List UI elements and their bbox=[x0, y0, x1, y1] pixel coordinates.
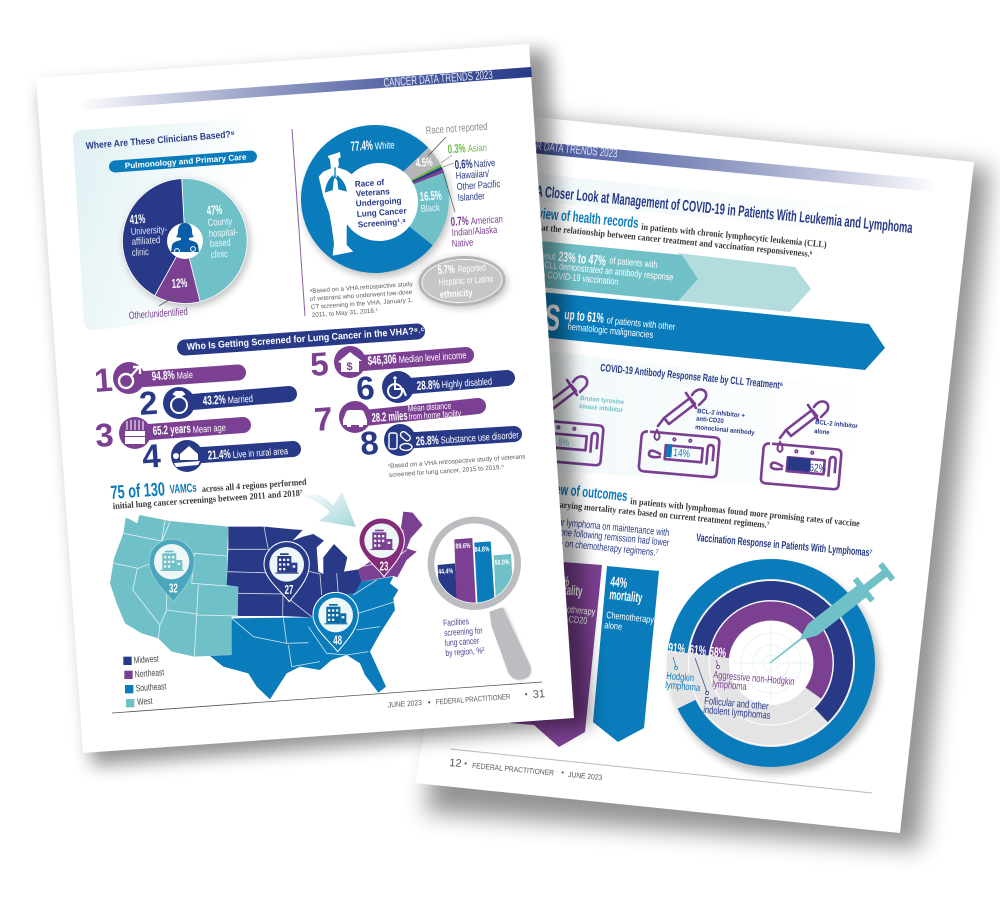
device: Bruton tyrosine kinase inhibitor: Bruton tyrosine bbox=[580, 395, 625, 406]
stat 6: highly disabled: 6 bbox=[355, 369, 376, 407]
caption: facilities screening: lung cancer bbox=[444, 636, 480, 648]
callout: Native Hawaiian/Other Pacific Islander: Islander bbox=[457, 190, 485, 203]
pill: pulmonology and primary care: Pulmonology and Primary Care bbox=[124, 153, 247, 170]
donut chart: race of veterans: 16.5% bbox=[419, 189, 443, 205]
stat 2: married: 43.2% bbox=[202, 393, 227, 409]
subhead: review of outcomes bbox=[508, 478, 860, 530]
callout: follicular and other indolent lymphomas bbox=[695, 658, 771, 721]
chart: vaccination response concentric rings: 91% bbox=[668, 641, 686, 657]
footnote: race study: ᵃBased on a VHA retrospective study bbox=[310, 281, 414, 295]
pie chart: clinician location: clinic bbox=[131, 246, 150, 258]
footer: page 31: FEDERAL PRACTITIONER bbox=[436, 694, 511, 707]
caption: facilities screening: Facilities bbox=[443, 616, 469, 628]
callout: American Indian/Alaska Native bbox=[443, 172, 503, 249]
footnote: screening study: screened for lung cancer, 2015 to 2019.⁸ bbox=[389, 464, 504, 479]
stat 5: median income: $46,306 bbox=[367, 353, 397, 369]
footnote: screening study bbox=[388, 453, 526, 479]
pin: Midwest 27 bbox=[264, 542, 309, 602]
callout: aggressive non-Hodgkin lymphoma: Aggressive non-Hodgkin bbox=[713, 669, 795, 687]
stat 1: male: Male bbox=[176, 369, 193, 381]
device: Bruton tyrosine kinase inhibitor: kinase inhibitor bbox=[579, 403, 624, 414]
device: BCL-2 inhibitor alone bbox=[761, 401, 859, 490]
footnote: race study: CT screening in the VHA, January 1, bbox=[311, 297, 413, 311]
footnote: race study bbox=[310, 281, 414, 319]
page shadow: left page bbox=[42, 50, 592, 766]
legend: regions: Midwest bbox=[133, 654, 160, 666]
bar: chemotherapy alone mortality: 44% bbox=[610, 575, 628, 591]
stat 6: highly disabled: 28.8% bbox=[416, 378, 441, 394]
callout: Native Hawaiian/Other Pacific Islander: Hawaiian/ bbox=[455, 168, 490, 181]
pin: Northeast 23 bbox=[359, 518, 404, 577]
badge: Hispanic or Latino ethnicity: 5.7% bbox=[437, 263, 455, 278]
stat 7: distance from home facility: 28.2 miles bbox=[371, 410, 408, 426]
device: BCL-2 inhibitor alone: BCL-2 inhibitor bbox=[815, 419, 859, 430]
region: Northeast bbox=[358, 512, 423, 582]
stat 8: substance use disorder bbox=[359, 424, 519, 462]
chevron: up to 61%: VS bbox=[528, 295, 562, 339]
bar: chemotherapy alone mortality bbox=[593, 566, 659, 742]
device: BCL-2 inhibitor plus anti-CD20 bbox=[639, 389, 755, 478]
subhead: review of outcomes: in patients with lymphomas found more promising rates of vaccine bbox=[630, 495, 860, 529]
stat 7: distance from home facility: from home facility bbox=[408, 408, 461, 422]
stat 2: married: Married bbox=[227, 393, 253, 406]
legend: regions: Northeast bbox=[134, 667, 165, 680]
pin: West 32: 32 bbox=[169, 582, 178, 596]
pie chart: clinician location: County bbox=[207, 215, 233, 228]
arrow: pointing to map bbox=[298, 492, 356, 527]
callout: Native Hawaiian/Other Pacific Islander: Other Pacific bbox=[456, 178, 501, 192]
chevron: 23% to 47%: of patients with bbox=[609, 254, 658, 270]
magnifier: facilities screening by region: 50.0% bbox=[494, 558, 510, 567]
chevron: 23% to 47%: About bbox=[535, 249, 556, 262]
pie chart: clinician location: based bbox=[209, 237, 231, 249]
badge: Hispanic or Latino ethnicity: Hispanic or Latino bbox=[438, 272, 494, 288]
device: BCL-2 inhibitor plus anti-CD20: monoclonal antibody bbox=[695, 424, 755, 437]
donut chart: race of veterans: 77.4% bbox=[350, 138, 374, 155]
callout: American Indian/Alaska Native: Native bbox=[451, 237, 474, 249]
callout: follicular and other indolent lymphomas: indolent lymphomas bbox=[703, 704, 771, 721]
icon: wheelchair bbox=[388, 376, 406, 398]
callout: other/unidentified: Other/unidentified bbox=[128, 306, 188, 321]
pie chart: clinician location: affiliated bbox=[131, 234, 161, 247]
callout: follicular and other indolent lymphomas: Follicular and other bbox=[704, 695, 769, 712]
bar: chemotherapy alone mortality: Chemotherapy bbox=[606, 609, 655, 625]
stat 7: distance from home facility: 7 bbox=[313, 400, 334, 438]
stat 7: distance from home facility bbox=[313, 400, 478, 438]
stat 4: rural area: 4 bbox=[141, 437, 162, 475]
footer: page 31: 31 bbox=[532, 688, 545, 701]
legend: regions: Southeast bbox=[135, 681, 167, 694]
device: BCL-2 inhibitor plus anti-CD20: anti-CD20 bbox=[696, 415, 725, 425]
pin: Midwest 27: 27 bbox=[285, 583, 293, 598]
stat 4: rural area: 21.4% bbox=[207, 447, 232, 463]
chevron: up to 61%: hematologic malignancies bbox=[567, 321, 654, 340]
page: Federal Practitioner page 31 (lung cancer screening) bbox=[36, 44, 574, 753]
pin: Southeast 48: 48 bbox=[333, 634, 342, 648]
callout: Hodgkin lymphoma: lymphoma bbox=[665, 679, 701, 693]
text block: mortality comparison: anti-CD20 alone following remission had lower bbox=[519, 522, 670, 548]
donut centre label bbox=[354, 177, 408, 230]
text block: mortality comparison bbox=[494, 510, 670, 558]
bar: chemotherapy plus anti-CD20 mortality: + anti-CD20 bbox=[548, 612, 588, 626]
icon: birthday cake bbox=[125, 420, 145, 444]
chart title: vaccination response: Vaccination Response in Patients With Lymphomas⁷ bbox=[696, 532, 873, 559]
caption: facilities screening: by region, %² bbox=[445, 645, 485, 658]
bar: chemotherapy alone mortality: mortality bbox=[609, 588, 644, 606]
stat 3: mean age: Mean age bbox=[192, 422, 226, 435]
stat 5: median income bbox=[309, 345, 467, 383]
header band: right page bbox=[500, 137, 937, 192]
panel: antibody response bbox=[540, 350, 870, 490]
caption: facilities screening: screening for bbox=[444, 625, 483, 638]
device: BCL-2 inhibitor plus anti-CD20: 14% bbox=[673, 447, 691, 461]
chevron: 23% to 47% bbox=[510, 238, 811, 312]
badge: Hispanic or Latino ethnicity bbox=[417, 254, 507, 308]
text block: mortality comparison: mortality than those on chemotherapy regimens.⁷ bbox=[499, 531, 659, 558]
stat 7: distance from home facility: Mean distance bbox=[407, 401, 451, 414]
stat 3: mean age bbox=[94, 416, 243, 454]
US map and magnifier bbox=[110, 512, 531, 707]
header band: left page: CANCER DATA TRENDS 2023 bbox=[383, 69, 494, 90]
legend: regions: West bbox=[137, 696, 153, 707]
footer: page 31: • bbox=[427, 698, 431, 707]
callout: race not reported: Race not reported bbox=[425, 121, 488, 136]
stat 1: male bbox=[93, 361, 238, 399]
donut centre label: Undergoing bbox=[355, 195, 402, 209]
stat 6: highly disabled: Highly disabled bbox=[441, 375, 493, 390]
device: BCL-2 inhibitor alone: 62% bbox=[809, 462, 827, 476]
footer: page 31: JUNE 2023 bbox=[388, 699, 422, 710]
stat 8: substance use disorder: 26.8% bbox=[415, 433, 440, 449]
text block: mortality comparison: Patients with follicular lymphoma on maintenance with bbox=[494, 510, 670, 538]
callout: aggressive non-Hodgkin lymphoma bbox=[712, 660, 795, 692]
stat 4: rural area: Live in rural area bbox=[232, 445, 289, 460]
subhead: review of health records: in patients with chronic lymphocytic leukemia (CLL) bbox=[641, 221, 827, 250]
callout: Native Hawaiian/Other Pacific Islander bbox=[443, 157, 501, 203]
icon: house with dollar bbox=[338, 352, 362, 373]
callout: Hodgkin lymphoma bbox=[665, 657, 701, 693]
bar: chemotherapy plus anti-CD20 mortality: mortality bbox=[549, 582, 583, 600]
footer: page 31: • bbox=[524, 690, 528, 699]
callout: Hodgkin lymphoma: Hodgkin bbox=[666, 670, 695, 684]
donut chart: race of veterans: Black bbox=[420, 202, 441, 214]
pie chart: clinician location: 41% bbox=[129, 212, 146, 228]
stat 2: married bbox=[138, 384, 289, 422]
chevron: 23% to 47%: CLL demonstrated an antibody response bbox=[544, 259, 674, 283]
heading: 75 of 130 VAMCs: initial lung cancer screenings between 2011 and 2018⁷ bbox=[112, 487, 303, 511]
pie chart: clinician location: University- bbox=[130, 224, 167, 237]
footer: page 31 bbox=[112, 682, 545, 713]
footer: page 12: FEDERAL PRACTITIONER bbox=[472, 762, 554, 778]
chevron: up to 61% bbox=[510, 289, 885, 370]
bar: chemotherapy plus anti-CD20 mortality bbox=[510, 558, 602, 747]
magnifier: facilities screening by region: 89.6% bbox=[455, 542, 471, 551]
footer: page 12 bbox=[449, 749, 872, 793]
bar: chemotherapy plus anti-CD20 mortality: % bbox=[561, 574, 570, 590]
stat 8: substance use disorder: Substance use disorder bbox=[440, 429, 519, 446]
chevron: 23% to 47%: 23% to 47% bbox=[558, 249, 607, 269]
chart: vaccination response concentric rings bbox=[667, 559, 880, 774]
bar: chemotherapy alone mortality: alone bbox=[604, 619, 623, 632]
callout: aggressive non-Hodgkin lymphoma: lymphoma bbox=[712, 678, 748, 692]
subhead: review of health records: looked at the relationship between cancer treatment and vaccination responsiveness.⁶ bbox=[516, 220, 813, 259]
device: BCL-2 inhibitor alone: alone bbox=[814, 428, 830, 437]
donut chart: race of veterans bbox=[301, 125, 451, 277]
subhead: review of outcomes: A review of outcomes bbox=[528, 478, 628, 505]
magnifier: facilities screening by region bbox=[428, 517, 531, 681]
bar: chemotherapy plus anti-CD20 mortality: Chemotherapy bbox=[547, 602, 596, 617]
header band: left page bbox=[78, 67, 532, 110]
subhead: review of health records: A review of health records bbox=[519, 203, 639, 232]
pie chart: clinician location bbox=[122, 179, 250, 307]
stat 2: married: 2 bbox=[138, 384, 159, 422]
badge: Hispanic or Latino ethnicity: ethnicity bbox=[439, 287, 473, 300]
pin: Southeast 48 bbox=[313, 592, 358, 652]
magnifier: facilities screening by region: 44.4% bbox=[438, 567, 454, 576]
map: US regions bbox=[110, 512, 423, 699]
heading: 75 of 130 VAMCs bbox=[110, 476, 307, 511]
stat 1: male: 94.8% bbox=[151, 368, 176, 384]
icon: car bbox=[343, 410, 367, 427]
stat 5: median income: 5 bbox=[309, 345, 330, 383]
pie chart: clinician location: 47% bbox=[206, 203, 223, 219]
caption: facilities screening bbox=[443, 616, 485, 658]
donut chart: race of veterans: 4.5% bbox=[415, 156, 433, 171]
callout: American Indian/Alaska Native: American bbox=[470, 213, 503, 227]
stat 3: mean age: 3 bbox=[94, 416, 115, 454]
footer: page 12: JUNE 2023 bbox=[568, 771, 603, 782]
page: Federal Practitioner page 12 (COVID-19 in leukemia and lymphoma) bbox=[415, 117, 974, 833]
donut centre label: Screening¹˒ᵃ bbox=[357, 216, 407, 230]
icon: ring bbox=[171, 392, 187, 413]
heading: 75 of 130 VAMCs: across all 4 regions performed bbox=[201, 476, 307, 494]
heading: closer look: A Closer Look at Management of COVID-19 in Patients With Leukemia and Lymphoma bbox=[535, 182, 914, 237]
heading: clinicians based: Where Are These Clinicians Based?⁸ bbox=[85, 129, 235, 151]
region: Southeast bbox=[210, 577, 398, 699]
chart: vaccination response concentric rings: 61% bbox=[689, 643, 707, 659]
callout: Asian: 0.3% bbox=[447, 143, 466, 157]
pie chart: clinician location: 12% bbox=[171, 276, 188, 292]
heading panel bbox=[500, 170, 915, 238]
device: Bruton tyrosine kinase inhibitor: 8% bbox=[558, 436, 570, 448]
callout: Native Hawaiian/Other Pacific Islander: 0.6% bbox=[454, 158, 473, 173]
stat 6: highly disabled bbox=[355, 369, 507, 407]
stat 8: substance use disorder: 8 bbox=[359, 424, 380, 462]
callout: Asian: Asian bbox=[467, 142, 487, 154]
chevron: up to 61%: of patients with other bbox=[606, 314, 676, 332]
callout: American Indian/Alaska Native: 0.7% bbox=[450, 215, 469, 230]
pin: Northeast 23: 23 bbox=[380, 560, 388, 574]
badge: Hispanic or Latino ethnicity: Reported bbox=[457, 261, 486, 275]
pie chart: clinician location: clinic bbox=[210, 248, 229, 260]
magnifier: facilities screening by region: 84.8% bbox=[474, 545, 490, 554]
chevron: 23% to 47%: to COVID-19 vaccination bbox=[539, 268, 619, 287]
footnote: race study: 2011, to May 31, 2018.¹ bbox=[312, 307, 378, 319]
banner: who is getting screened: Who Is Getting Screened for Lung Cancer in the VHA?⁸˒ᶜ bbox=[186, 325, 425, 352]
pin: West 32 bbox=[149, 539, 194, 602]
donut chart: race of veterans: White bbox=[374, 139, 395, 152]
heading: 75 of 130 VAMCs: 75 of 130 bbox=[110, 479, 166, 504]
icon: doctor bbox=[171, 223, 199, 253]
stat 4: rural area bbox=[141, 437, 293, 475]
pie chart: clinician location: hospital- bbox=[208, 226, 238, 239]
subhead: review of health records bbox=[516, 203, 827, 259]
donut centre label: Veterans bbox=[355, 186, 390, 199]
heading: 75 of 130 VAMCs: VAMCs bbox=[169, 482, 197, 497]
legend: regions bbox=[123, 654, 167, 707]
region: Midwest bbox=[227, 527, 362, 617]
icon: bottle and pills bbox=[389, 430, 412, 450]
icon: syringe bbox=[761, 559, 898, 674]
callout: Asian bbox=[441, 142, 487, 163]
chevron: up to 61%: up to 61% bbox=[564, 308, 605, 326]
stat 1: male: 1 bbox=[93, 361, 114, 399]
region: West bbox=[110, 515, 238, 657]
icon: house with dollar: $ bbox=[346, 361, 353, 373]
panel: where are these clinicians based bbox=[73, 118, 266, 330]
subhead: review of outcomes: response and varying mortality rates based on current treatment regimens.⁷ bbox=[508, 494, 770, 530]
device: Bruton tyrosine kinase inhibitor bbox=[523, 376, 625, 466]
donut centre label: Lung Cancer bbox=[356, 205, 408, 219]
page shadow: right page bbox=[425, 122, 990, 848]
chart: vaccination response concentric rings: 58% bbox=[709, 645, 727, 661]
footnote: screening study: ᶜBased on a VHA retrospective study of veterans bbox=[388, 453, 526, 470]
callout: Native Hawaiian/Other Pacific Islander: Native bbox=[473, 157, 496, 170]
callout: American Indian/Alaska Native: Indian/Alaska bbox=[451, 224, 498, 238]
footer: page 12: • bbox=[561, 768, 565, 777]
icon: male symbol bbox=[119, 367, 140, 388]
donut centre label: Race of bbox=[354, 177, 385, 189]
callout: other/unidentified bbox=[128, 296, 188, 321]
footnote: race study: of veterans who underwent low-dose bbox=[310, 289, 413, 303]
icon: soldier with lungs bbox=[319, 152, 353, 256]
callout: race not reported bbox=[425, 121, 488, 156]
icon: farm house bbox=[173, 446, 200, 467]
stat 5: median income: Median level income bbox=[398, 349, 467, 365]
footer: page 12: • bbox=[464, 759, 468, 768]
footer: page 12: 12 bbox=[449, 757, 462, 770]
chart title: antibody response: COVID-19 Antibody Response Rate by CLL Treatment⁶ bbox=[600, 362, 784, 391]
device: BCL-2 inhibitor plus anti-CD20: BCL-2 inhibitor + bbox=[697, 408, 746, 420]
header band: right page: CANCER DATA TRENDS 2023 bbox=[508, 137, 618, 161]
stat 3: mean age: 65.2 years bbox=[152, 423, 191, 439]
